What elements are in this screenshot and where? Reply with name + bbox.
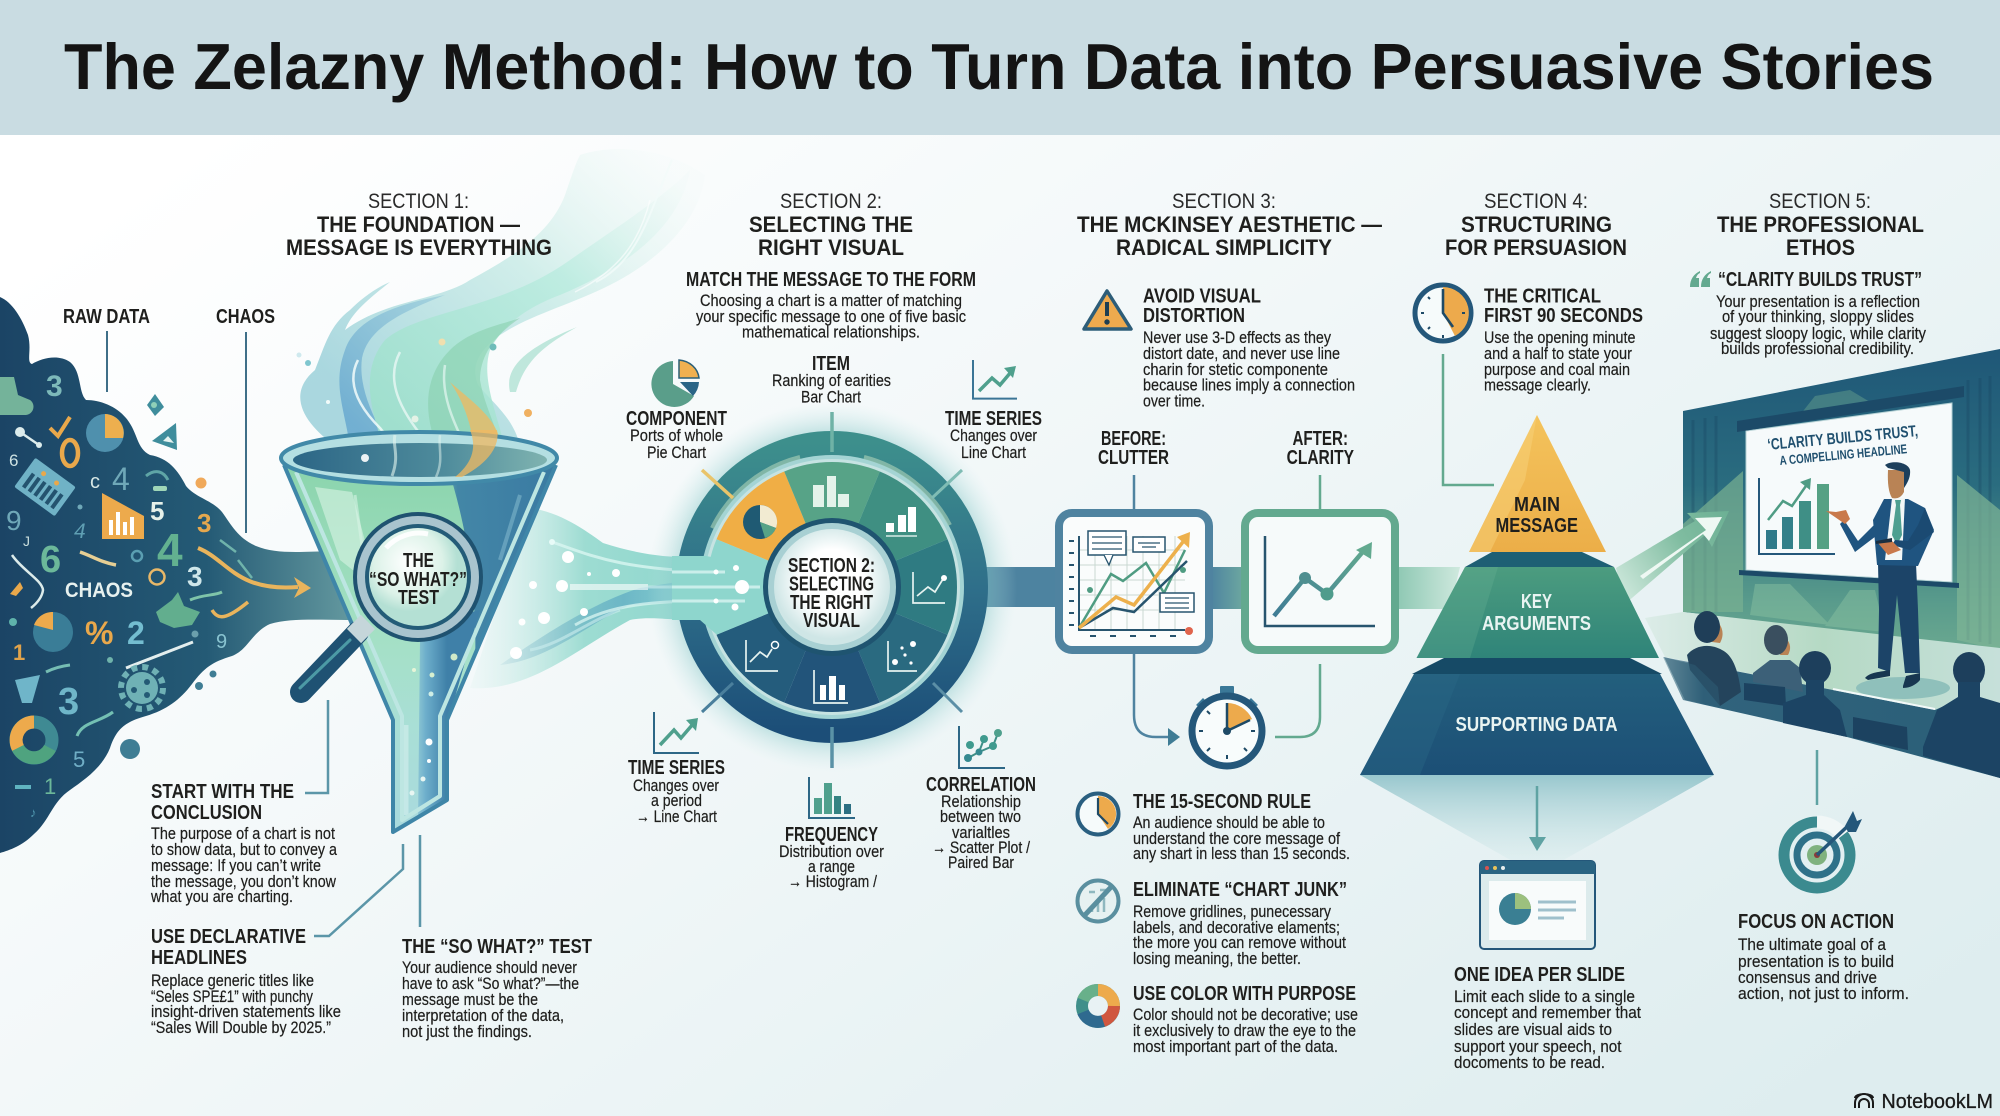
text block: focus on action: The ultimate goal of a (1738, 936, 1887, 954)
text block: critical first 90 seconds (1484, 286, 1643, 394)
text block: critical first 90 seconds: THE CRITICAL (1484, 286, 1601, 308)
icon: magnifying glass with so-what test: “SO WHAT?” (369, 569, 467, 591)
list item: eliminate chart junk: the more you can remove without (1133, 934, 1346, 952)
chart type: time series upper: Line Chart (961, 444, 1026, 462)
section 4 heading: FOR PERSUASION (1445, 235, 1627, 260)
panel: raw data chaos cloud: ♪ (30, 805, 36, 820)
chart type: time series upper (945, 360, 1042, 462)
list item: 15-second rule: understand the core message of (1133, 830, 1340, 848)
text block: avoid visual distortion: distort date, and never use line (1143, 345, 1340, 363)
section 5 heading: THE PROFESSIONAL (1717, 212, 1924, 237)
chart type: component (626, 360, 727, 462)
section 3 heading: SECTION 3: (1172, 190, 1276, 213)
chart type: frequency: → Histogram / (788, 873, 877, 891)
panel: raw data chaos cloud: 4 (157, 524, 183, 576)
section 4 heading: STRUCTURING (1461, 212, 1612, 237)
funnel (280, 430, 560, 840)
callout: chaos label: CHAOS (216, 306, 275, 328)
panel: raw data chaos cloud: 3 (187, 561, 203, 592)
section 1 heading (286, 190, 552, 260)
icon: magnifying glass with so-what test (300, 512, 483, 692)
section 2 heading (749, 190, 913, 260)
chart type: time series lower: → Line Chart (636, 808, 717, 826)
icon: magnifying glass with so-what test: THE (403, 550, 434, 572)
text block: focus on action: action, not just to inform. (1738, 985, 1909, 1003)
text block: clarity builds trust: of your thinking, sloppy slides (1722, 308, 1914, 326)
chart type: correlation: CORRELATION (926, 774, 1036, 796)
arrows around stopwatch (1134, 654, 1320, 746)
tier: main message: MESSAGE (1496, 515, 1578, 537)
icon: warning triangle (1084, 291, 1131, 329)
section 3 heading: RADICAL SIMPLICITY (1116, 235, 1332, 260)
panel: raw data chaos cloud: % (85, 615, 113, 651)
steam rising from funnel (296, 149, 705, 478)
chart type: correlation: varialtles (952, 824, 1010, 842)
text block: the so what test: not just the findings. (402, 1023, 532, 1041)
connector band: wheel to charts (985, 567, 1060, 607)
text block: clarity builds trust: builds professional credibility. (1721, 340, 1914, 358)
text block: use declarative headlines: “Seles SPE£1” with punchy (151, 988, 314, 1006)
chart type: correlation (926, 726, 1036, 872)
text block: critical first 90 seconds: Use the opening minute (1484, 329, 1636, 347)
section 3 heading (1077, 190, 1382, 260)
chart type: time series lower (628, 712, 725, 826)
panel: raw data chaos cloud: 3 (58, 681, 79, 723)
wheel hub label: VISUAL (803, 610, 860, 632)
text block: match the message to the form: mathematical relationships. (742, 324, 920, 342)
text block: the so what test: interpretation of the data, (402, 1007, 564, 1025)
panel: presentation scene (1645, 349, 2000, 778)
connector: clock to pyramid (1443, 354, 1494, 485)
text block: start with the conclusion (150, 700, 338, 906)
panel: raw data chaos cloud: 1 (44, 774, 56, 799)
text block: start with the conclusion: to show data, but to convey a (151, 841, 338, 859)
panel: raw data chaos cloud: 6 (9, 451, 18, 470)
text block: one idea per slide: docoments to be read. (1454, 1054, 1605, 1072)
list item: 15-second rule: any shart in less than 15 seconds. (1133, 845, 1350, 863)
chart type: frequency: a range (808, 858, 855, 876)
segment: frequency (784, 650, 880, 712)
arrow: pyramid down to slide (1529, 786, 1546, 851)
section 2 heading: SELECTING THE (749, 212, 913, 237)
text block: clarity builds trust: Your presentation is a reflection (1716, 293, 1920, 311)
wheel hub label: THE RIGHT (790, 592, 873, 614)
segment: flow entry (707, 539, 769, 635)
text block: the so what test: have to ask “So what?”—the (402, 975, 579, 993)
text block: the so what test: message must be the (402, 991, 538, 1009)
icon: slide window (1480, 861, 1595, 949)
chart type: correlation: between two (940, 808, 1021, 826)
panel: raw data chaos cloud: 6 (40, 539, 61, 581)
text block: use declarative headlines: USE DECLARATIVE (151, 926, 306, 948)
list item: eliminate chart junk (1078, 879, 1347, 968)
section 5 heading: ETHOS (1786, 235, 1855, 260)
chart type: time series lower: TIME SERIES (628, 757, 725, 779)
chart type: component: Pie Chart (647, 444, 706, 462)
chart type: correlation: Relationship (941, 793, 1021, 811)
notebooklm logo: NotebookLM (1882, 1091, 1993, 1113)
tier: main message: MAIN (1514, 494, 1560, 516)
text block: focus on action (1738, 911, 1909, 1003)
text block: start with the conclusion: message: If you can’t write (151, 857, 321, 875)
chart type: frequency (779, 777, 884, 891)
list item: use color with purpose: USE COLOR WITH PURPOSE (1133, 983, 1356, 1005)
callout: raw data label (63, 306, 150, 392)
chart type: frequency: Distribution over (779, 843, 884, 861)
section 2 heading: SECTION 2: (780, 190, 882, 213)
panel: raw data chaos cloud: 5 (150, 496, 164, 526)
panel: raw data chaos cloud: 9 (6, 505, 22, 536)
text block: critical first 90 seconds: purpose and coal main (1484, 361, 1630, 379)
section 3 heading: THE MCKINSEY AESTHETIC — (1077, 212, 1382, 237)
chart wheel (647, 402, 1017, 772)
text block: start with the conclusion: CONCLUSION (151, 802, 262, 824)
text block: focus on action: FOCUS ON ACTION (1738, 911, 1894, 933)
header band (0, 0, 2000, 135)
text block: use declarative headlines: Replace generic titles like (151, 972, 314, 990)
chart type: item: Bar Chart (801, 388, 861, 406)
panel: raw data chaos cloud: 1 (13, 640, 25, 665)
projection screen: A COMPELLING HEADLINE (1779, 441, 1908, 468)
text block: clarity builds trust (1710, 269, 1927, 358)
text block: avoid visual distortion: DISTORTION (1143, 305, 1245, 327)
text block: avoid visual distortion: charin for stetic componente (1143, 361, 1328, 379)
text block: match the message to the form (686, 269, 976, 342)
list item: use color with purpose (1082, 983, 1358, 1056)
title: The Zelazny Method: How to Turn Data into Persuasive Stories (64, 30, 1934, 103)
panel: raw data chaos cloud: 4 (112, 461, 130, 497)
segment: right (895, 539, 957, 635)
presenter (1826, 462, 1934, 688)
list item: use color with purpose: it exclusively to draw the eye to the (1133, 1022, 1356, 1040)
projection screen (1737, 386, 1964, 588)
text block: start with the conclusion: START WITH THE (151, 781, 294, 803)
list item: eliminate chart junk: losing meaning, the better. (1133, 950, 1301, 968)
list item: 15-second rule: An audience should be able to (1133, 814, 1325, 832)
panel: raw data chaos cloud: 9 (216, 631, 227, 653)
chart type: correlation: → Scatter Plot / (932, 839, 1030, 857)
label: before clutter: BEFORE: (1101, 428, 1166, 450)
text block: match the message to the form: Choosing a chart is a matter of matching (700, 292, 962, 310)
tier: key arguments: KEY (1521, 591, 1552, 613)
text block: one idea per slide: ONE IDEA PER SLIDE (1454, 964, 1625, 986)
list item: eliminate chart junk: labels, and decorative elaments; (1133, 919, 1340, 937)
segment: component (716, 472, 806, 561)
text block: focus on action: consensus and drive (1738, 969, 1877, 987)
text block: match the message to the form: your specific message to one of five basic (696, 308, 966, 326)
text block: one idea per slide (1454, 964, 1641, 1072)
wheel hub label (788, 555, 875, 632)
section 2 heading: RIGHT VISUAL (758, 235, 904, 260)
chart type: time series upper: TIME SERIES (945, 408, 1042, 430)
list item: use color with purpose: Color should not be decorative; use (1133, 1006, 1358, 1024)
text block: avoid visual distortion (1143, 286, 1355, 410)
section 1 heading: THE FOUNDATION — (317, 212, 520, 237)
text block: start with the conclusion: the message, you don’t know (151, 873, 336, 891)
tier: key arguments: ARGUMENTS (1482, 613, 1591, 635)
text block: start with the conclusion: The purpose of a chart is not (151, 825, 335, 843)
text block: avoid visual distortion: AVOID VISUAL (1143, 286, 1261, 308)
text block: one idea per slide: support your speech, not (1454, 1038, 1622, 1056)
text block: clarity builds trust: “CLARITY BUILDS TRUST” (1718, 269, 1922, 291)
section 1 heading: MESSAGE IS EVERYTHING (286, 235, 552, 260)
label: before clutter (1098, 428, 1169, 509)
panel: before chart cluttered (1059, 513, 1209, 650)
panel: after chart clear (1245, 513, 1395, 650)
projection screen: ‘CLARITY BUILDS TRUST, (1767, 423, 1919, 454)
text block: avoid visual distortion: over time. (1143, 392, 1205, 410)
chart type: component: COMPONENT (626, 408, 727, 430)
chart type: item: Ranking of earities (772, 372, 891, 390)
list item: 15-second rule: THE 15-SECOND RULE (1133, 791, 1311, 813)
wheel hub label: SECTION 2: (788, 555, 875, 577)
text block: focus on action: presentation is to build (1738, 953, 1894, 971)
label: after clarity (1287, 428, 1355, 509)
pyramid (1360, 415, 1714, 875)
icon: magnifying glass with so-what test: TEST (398, 587, 439, 609)
stage floor (1645, 612, 2000, 710)
panel: raw data chaos cloud: 4 (74, 520, 86, 543)
panel: raw data chaos cloud: 5 (73, 747, 85, 772)
text block: use declarative headlines: “Sales Will Double by 2025.” (151, 1019, 331, 1037)
chart type: item (772, 353, 891, 406)
chart type: item: ITEM (812, 353, 850, 375)
chaos label: CHAOS (65, 579, 133, 602)
chart type: correlation: Paired Bar (948, 854, 1014, 872)
text block: use declarative headlines: insight-driven statements like (151, 1003, 341, 1021)
text block: avoid visual distortion: because lines imply a connection (1143, 376, 1355, 394)
chart type: component: Ports of whole (630, 427, 723, 445)
list item: 15-second rule (1078, 791, 1350, 863)
tier: supporting data (1360, 658, 1714, 775)
section 5 heading (1717, 190, 1924, 260)
panel: raw data chaos cloud: J (23, 533, 30, 549)
text block: avoid visual distortion: Never use 3-D effects as they (1143, 329, 1332, 347)
text block: one idea per slide: Limit each slide to a single (1454, 988, 1635, 1006)
text block: start with the conclusion: what you are charting. (150, 888, 293, 906)
segment: correlation (858, 613, 948, 702)
segment: time series (858, 472, 948, 561)
chart type: time series lower: a period (651, 792, 702, 810)
arrow: pyramid to presentation (1616, 511, 1729, 604)
text block: use declarative headlines (151, 844, 403, 1037)
section 4 heading: SECTION 4: (1484, 190, 1588, 213)
text block: the so what test (402, 835, 592, 1041)
text block: use declarative headlines: HEADLINES (151, 947, 247, 969)
audience (1664, 611, 2000, 778)
text block: one idea per slide: slides are visual aids to (1454, 1021, 1612, 1039)
text block: the so what test: Your audience should never (402, 959, 577, 977)
icon: quote marks (1690, 271, 1711, 287)
panel: raw data chaos cloud: 3 (46, 370, 63, 403)
connector: scene to target (1816, 750, 1818, 805)
text block: one idea per slide: concept and remember that (1454, 1004, 1641, 1022)
wheel hub label: SELECTING (789, 574, 874, 596)
tier: main message (1469, 415, 1606, 552)
list item: use color with purpose: most important part of the data. (1133, 1038, 1338, 1056)
chart type: frequency: FREQUENCY (785, 824, 878, 846)
section 1 heading: SECTION 1: (368, 190, 469, 213)
connector band: before to after (1210, 567, 1245, 609)
label: after clarity: CLARITY (1287, 447, 1355, 469)
label: after clarity: AFTER: (1292, 428, 1348, 450)
icon: clock first 90 seconds (1415, 285, 1471, 341)
label: before clutter: CLUTTER (1098, 447, 1169, 469)
chart type: time series upper: Changes over (950, 427, 1037, 445)
tier: supporting data: SUPPORTING DATA (1456, 714, 1618, 736)
panel: raw data chaos cloud (0, 297, 375, 853)
panel: raw data chaos cloud: 2 (127, 615, 145, 651)
flow stream from funnel to wheel (470, 508, 775, 688)
text block: the so what test: THE “SO WHAT?” TEST (402, 936, 592, 958)
text block: critical first 90 seconds: FIRST 90 SECONDS (1484, 305, 1643, 327)
segment: time series lower (716, 613, 806, 702)
section 4 heading (1445, 190, 1627, 260)
list item: eliminate chart junk: ELIMINATE “CHART JUNK” (1133, 879, 1347, 901)
tier: key arguments (1416, 552, 1659, 658)
text block: critical first 90 seconds: and a half to state your (1484, 345, 1632, 363)
list item: eliminate chart junk: Remove gridlines, punecessary (1133, 903, 1332, 921)
text block: match the message to the form: MATCH THE MESSAGE TO THE FORM (686, 269, 976, 291)
text block: clarity builds trust: suggest sloopy logic, while clarity (1710, 325, 1927, 343)
segment: item (784, 462, 880, 524)
callout: raw data label: RAW DATA (63, 306, 150, 328)
icon: stopwatch (1192, 686, 1262, 766)
connector band: after to pyramid (1395, 567, 1460, 609)
section 5 heading: SECTION 5: (1769, 190, 1871, 213)
panel: raw data chaos cloud: 3 (197, 508, 211, 538)
icon: target with dart (1784, 811, 1862, 888)
panel: raw data chaos cloud: c (90, 471, 100, 493)
chart type: time series lower: Changes over (633, 777, 719, 795)
front row base (1663, 657, 2000, 778)
text block: critical first 90 seconds: message clearly. (1484, 376, 1591, 394)
